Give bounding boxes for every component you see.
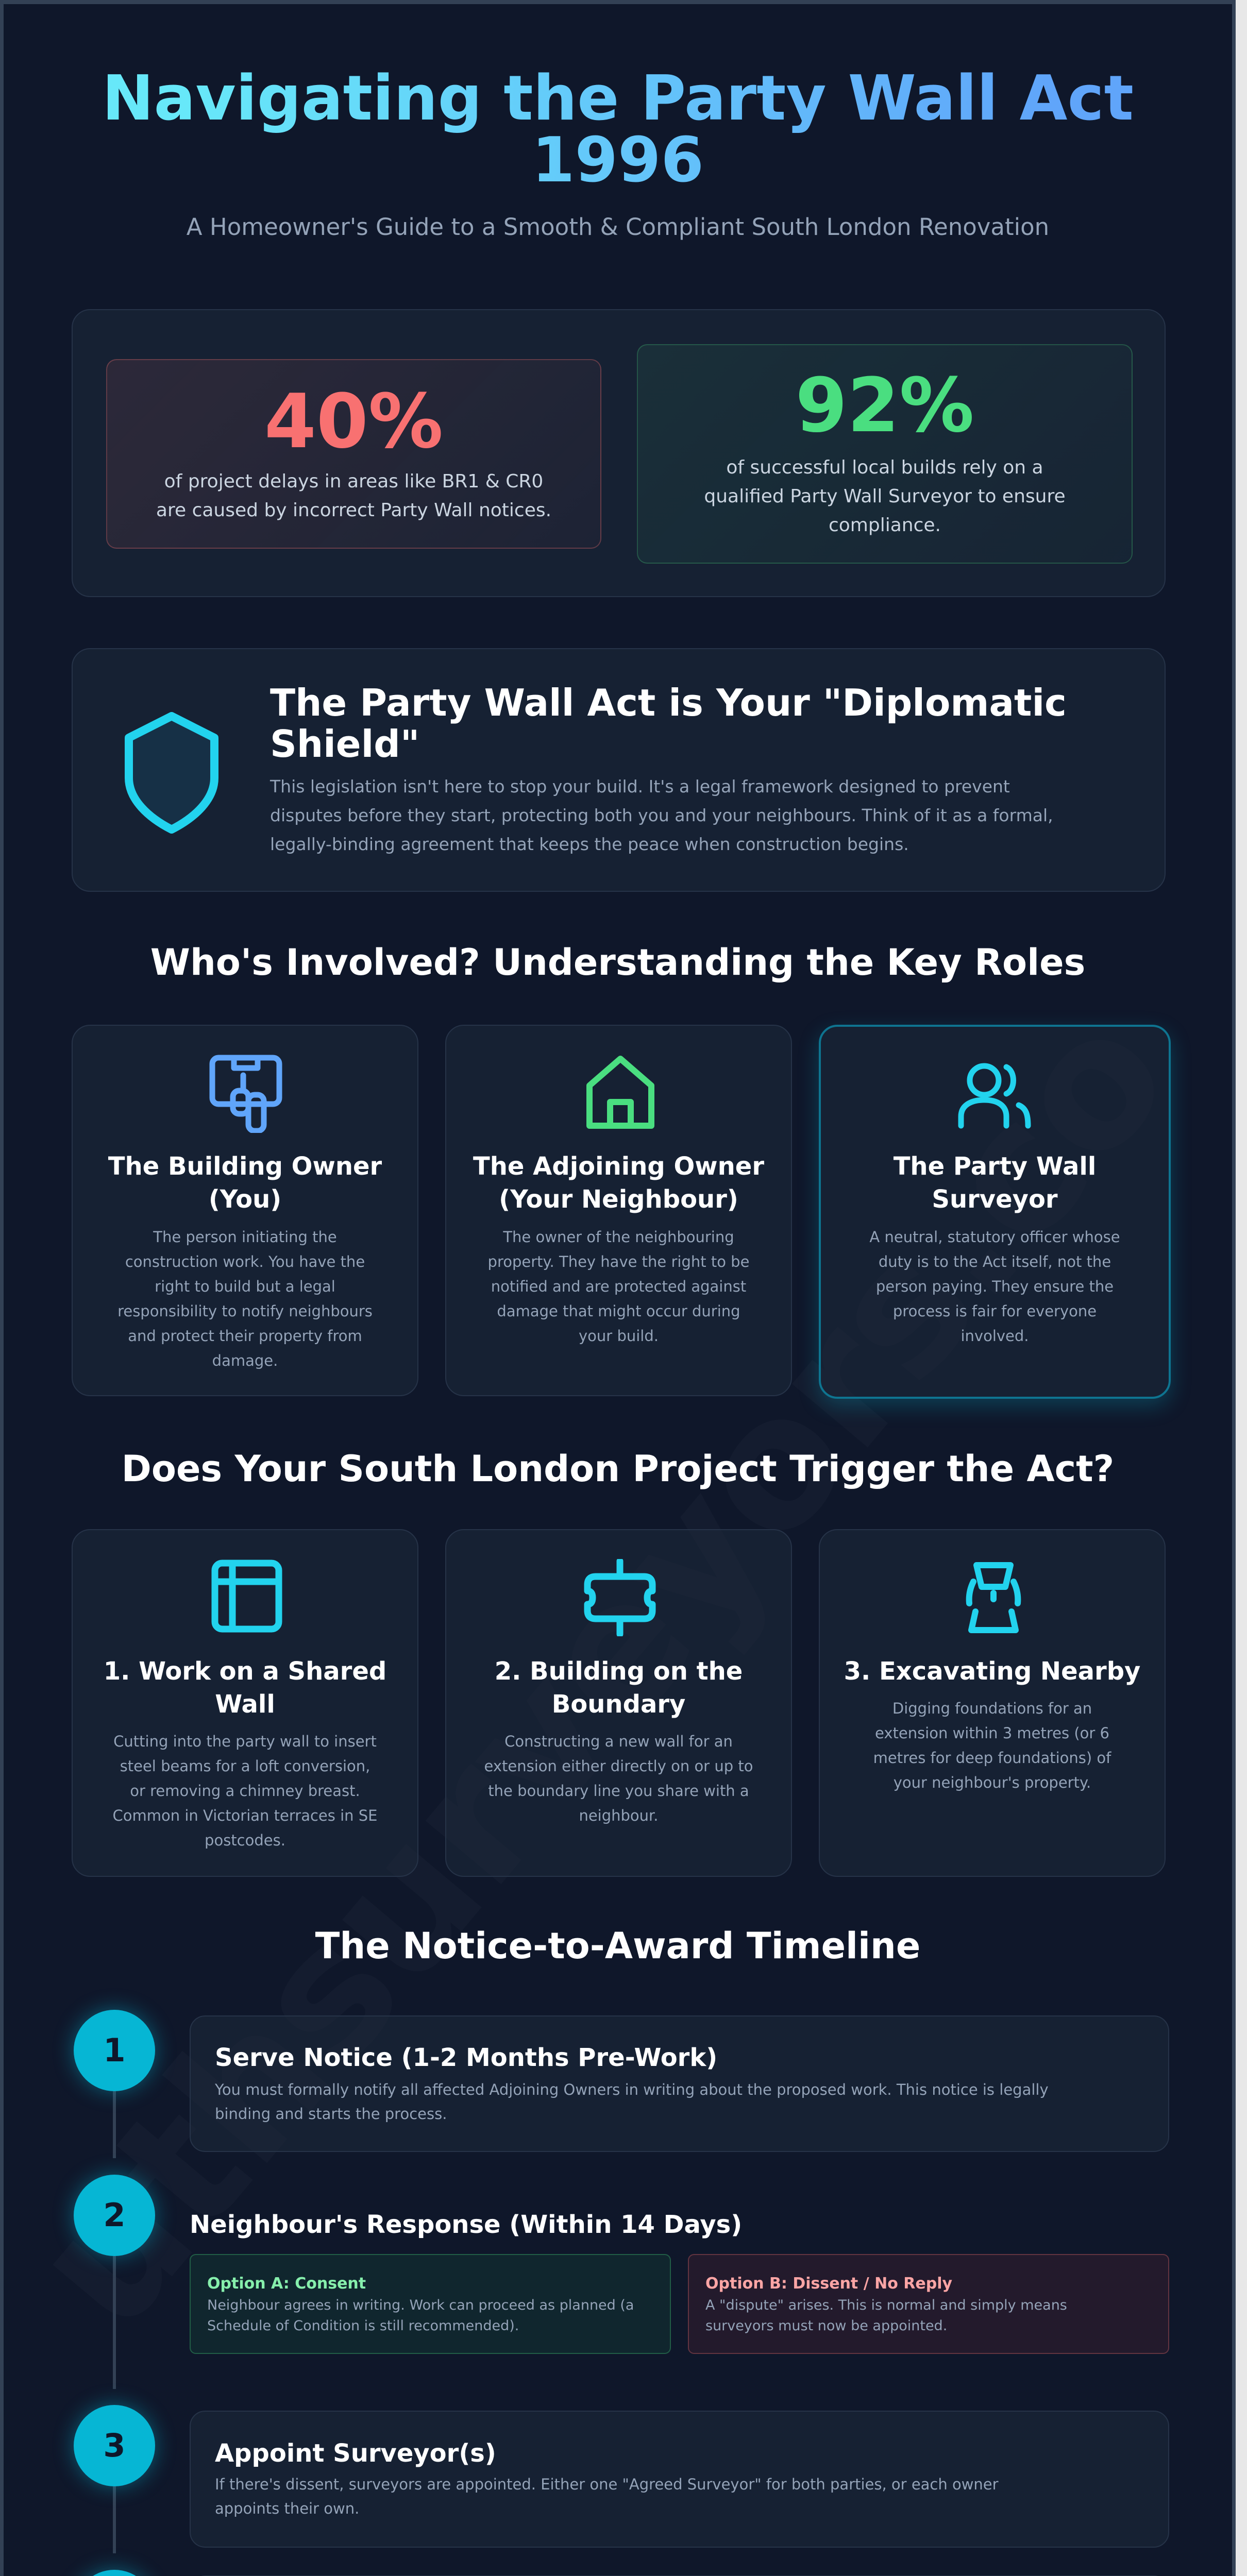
step 3 circle: 3 [103, 2427, 126, 2464]
card text: involved. [960, 1327, 1029, 1345]
stat text: qualified Party Wall Surveyor to ensure [704, 486, 1066, 507]
card: excavating [819, 1529, 1166, 1877]
card title [894, 1152, 1096, 1214]
card text [117, 1228, 373, 1369]
card text: responsibility to notify neighbours [117, 1302, 373, 1320]
number 40%: 40% [264, 378, 443, 465]
watermark: uthsurveyors.co [4, 972, 1209, 2366]
stat text: of project delays in areas like BR1 & CR0 [164, 471, 543, 492]
option B: dissent: surveyors must now be appointed. [705, 2318, 947, 2334]
card text: or removing a chimney breast. [130, 1782, 360, 1800]
card title [495, 1657, 743, 1719]
option B: dissent: Option B: Dissent / No Reply [705, 2275, 952, 2293]
option B: dissent [688, 2254, 1169, 2354]
card text [873, 1700, 1111, 1791]
card text: Constructing a new wall for an [504, 1733, 733, 1750]
step 3 circle [74, 2405, 155, 2486]
step 1 box [190, 2015, 1169, 2152]
heading: timeline: The Notice-to-Award Timeline [315, 1925, 920, 1967]
step 3 box: Appoint Surveyor(s) [215, 2439, 496, 2468]
card: building owner [72, 1025, 418, 1396]
icon: shield [125, 712, 218, 834]
step 2 title: Neighbour's Response (Within 14 Days) [190, 2210, 742, 2239]
heading: triggers: Does Your South London Project Trigger the Act? [122, 1448, 1114, 1490]
icon: wall panel [211, 1560, 282, 1632]
card title: The Building Owner [108, 1152, 382, 1181]
panel: stats [72, 309, 1166, 597]
step 1 box: binding and starts the process. [215, 2105, 447, 2123]
card text: damage that might occur during [497, 1302, 740, 1320]
card text: right to build but a legal [155, 1278, 335, 1295]
card text: duty is to the Act itself, not the [879, 1253, 1111, 1270]
body text: legally-binding agreement that keeps the peace when construction begins. [270, 834, 909, 854]
step 2 circle [74, 2175, 155, 2256]
icon: building owner [209, 1055, 282, 1133]
option B: dissent: A "dispute" arises. This is normal and simply means [705, 2297, 1067, 2313]
card title [108, 1152, 382, 1214]
step 2 circle: 2 [103, 2196, 126, 2234]
step 4 circle [74, 2570, 155, 2576]
card text: the boundary line you share with a [488, 1782, 749, 1800]
option A: consent: Option A: Consent [207, 2275, 366, 2293]
card title: The Party Wall [894, 1152, 1096, 1181]
stat text [156, 471, 551, 521]
card: boundary [445, 1529, 792, 1877]
icon: users [958, 1063, 1031, 1128]
heading: key roles: Who's Involved? Understanding the Key Roles [150, 941, 1085, 984]
card text: property. They have the right to be [488, 1253, 749, 1270]
step 1 circle [74, 2010, 155, 2091]
card text: postcodes. [205, 1832, 285, 1849]
card text: A neutral, statutory officer whose [869, 1228, 1120, 1246]
icon: boundary [584, 1559, 655, 1636]
card text: The person initiating the [153, 1228, 337, 1246]
card title: 1. Work on a Shared [104, 1657, 386, 1686]
card title: Boundary [552, 1690, 685, 1719]
heading: The Party Wall Act is Your "Diplomatic [270, 681, 1067, 724]
step 3 box: If there's dissent, surveyors are appointed. Either one "Agreed Surveyor" for both parties, or each owner [215, 2476, 999, 2493]
step 3 box: appoints their own. [215, 2500, 359, 2517]
card text [869, 1228, 1120, 1345]
title: 1996 [532, 125, 704, 196]
card text: your build. [579, 1327, 659, 1345]
card text [112, 1733, 377, 1849]
card text [488, 1228, 749, 1345]
card text: and protect their property from [128, 1327, 362, 1345]
card text: extension within 3 metres (or 6 [875, 1724, 1109, 1742]
card title [104, 1657, 386, 1719]
card text: process is fair for everyone [893, 1302, 1097, 1320]
card text: Digging foundations for an [892, 1700, 1092, 1717]
stat text: of successful local builds rely on a [726, 457, 1043, 478]
card text: your neighbour's property. [894, 1774, 1091, 1791]
card text: person paying. They ensure the [876, 1278, 1114, 1295]
card text: The owner of the neighbouring [503, 1228, 734, 1246]
step 3 box [190, 2411, 1169, 2548]
icon: house [586, 1056, 654, 1129]
body text: disputes before they start, protecting both you and your neighbours. Think of it as a formal, [270, 805, 1053, 825]
step 1 box: You must formally notify all affected Adjoining Owners in writing about the proposed work. This notice is legally [215, 2081, 1049, 2098]
body text: This legislation isn't here to stop your build. It's a legal framework designed to prevent [270, 776, 1010, 796]
card title: 2. Building on the [495, 1657, 743, 1686]
card title: 3. Excavating Nearby [844, 1657, 1140, 1686]
heading [270, 681, 1067, 766]
stat: 40% [106, 359, 601, 549]
heading: Shield" [270, 722, 419, 766]
card text: Common in Victorian terraces in SE [112, 1807, 377, 1824]
card title: (You) [209, 1185, 281, 1214]
title [4, 68, 1232, 192]
card text: steel beams for a loft conversion, [120, 1757, 370, 1775]
stat text: compliance. [829, 515, 941, 536]
step 4 box [190, 2575, 1169, 2576]
card: party wall surveyor [819, 1025, 1171, 1399]
card title: The Adjoining Owner [473, 1152, 764, 1181]
number 92%: 92% [795, 362, 974, 449]
step 1 box: Serve Notice (1-2 Months Pre-Work) [215, 2043, 717, 2072]
card title [473, 1152, 764, 1214]
card text [484, 1733, 753, 1824]
card text: construction work. You have the [125, 1253, 365, 1270]
card text: extension either directly on or up to [484, 1757, 753, 1775]
stat text [704, 457, 1066, 536]
card: adjoining owner [445, 1025, 792, 1396]
icon: excavation [966, 1562, 1021, 1633]
card: shared wall [72, 1529, 418, 1877]
card text: damage. [212, 1352, 278, 1369]
title: Navigating the Party Wall Act [102, 63, 1134, 134]
card title: (Your Neighbour) [499, 1185, 738, 1214]
option A: consent: Schedule of Condition is still recommended). [207, 2318, 519, 2334]
card text: metres for deep foundations) of [873, 1749, 1111, 1767]
body text [270, 776, 1053, 854]
card title: Wall [215, 1690, 275, 1719]
stat text: are caused by incorrect Party Wall notices. [156, 500, 551, 521]
option A: consent [190, 2254, 671, 2354]
option A: consent: Neighbour agrees in writing. Work can proceed as planned (a [207, 2297, 634, 2313]
step 1 circle: 1 [103, 2031, 126, 2069]
card text: Cutting into the party wall to insert [113, 1733, 377, 1750]
card text: notified and are protected against [491, 1278, 746, 1295]
stat: 92% [637, 344, 1133, 564]
panel: diplomatic shield [72, 648, 1166, 892]
card title: Surveyor [932, 1185, 1058, 1214]
subtitle: A Homeowner's Guide to a Smooth & Compliant South London Renovation [187, 213, 1049, 241]
card text: neighbour. [579, 1807, 659, 1824]
